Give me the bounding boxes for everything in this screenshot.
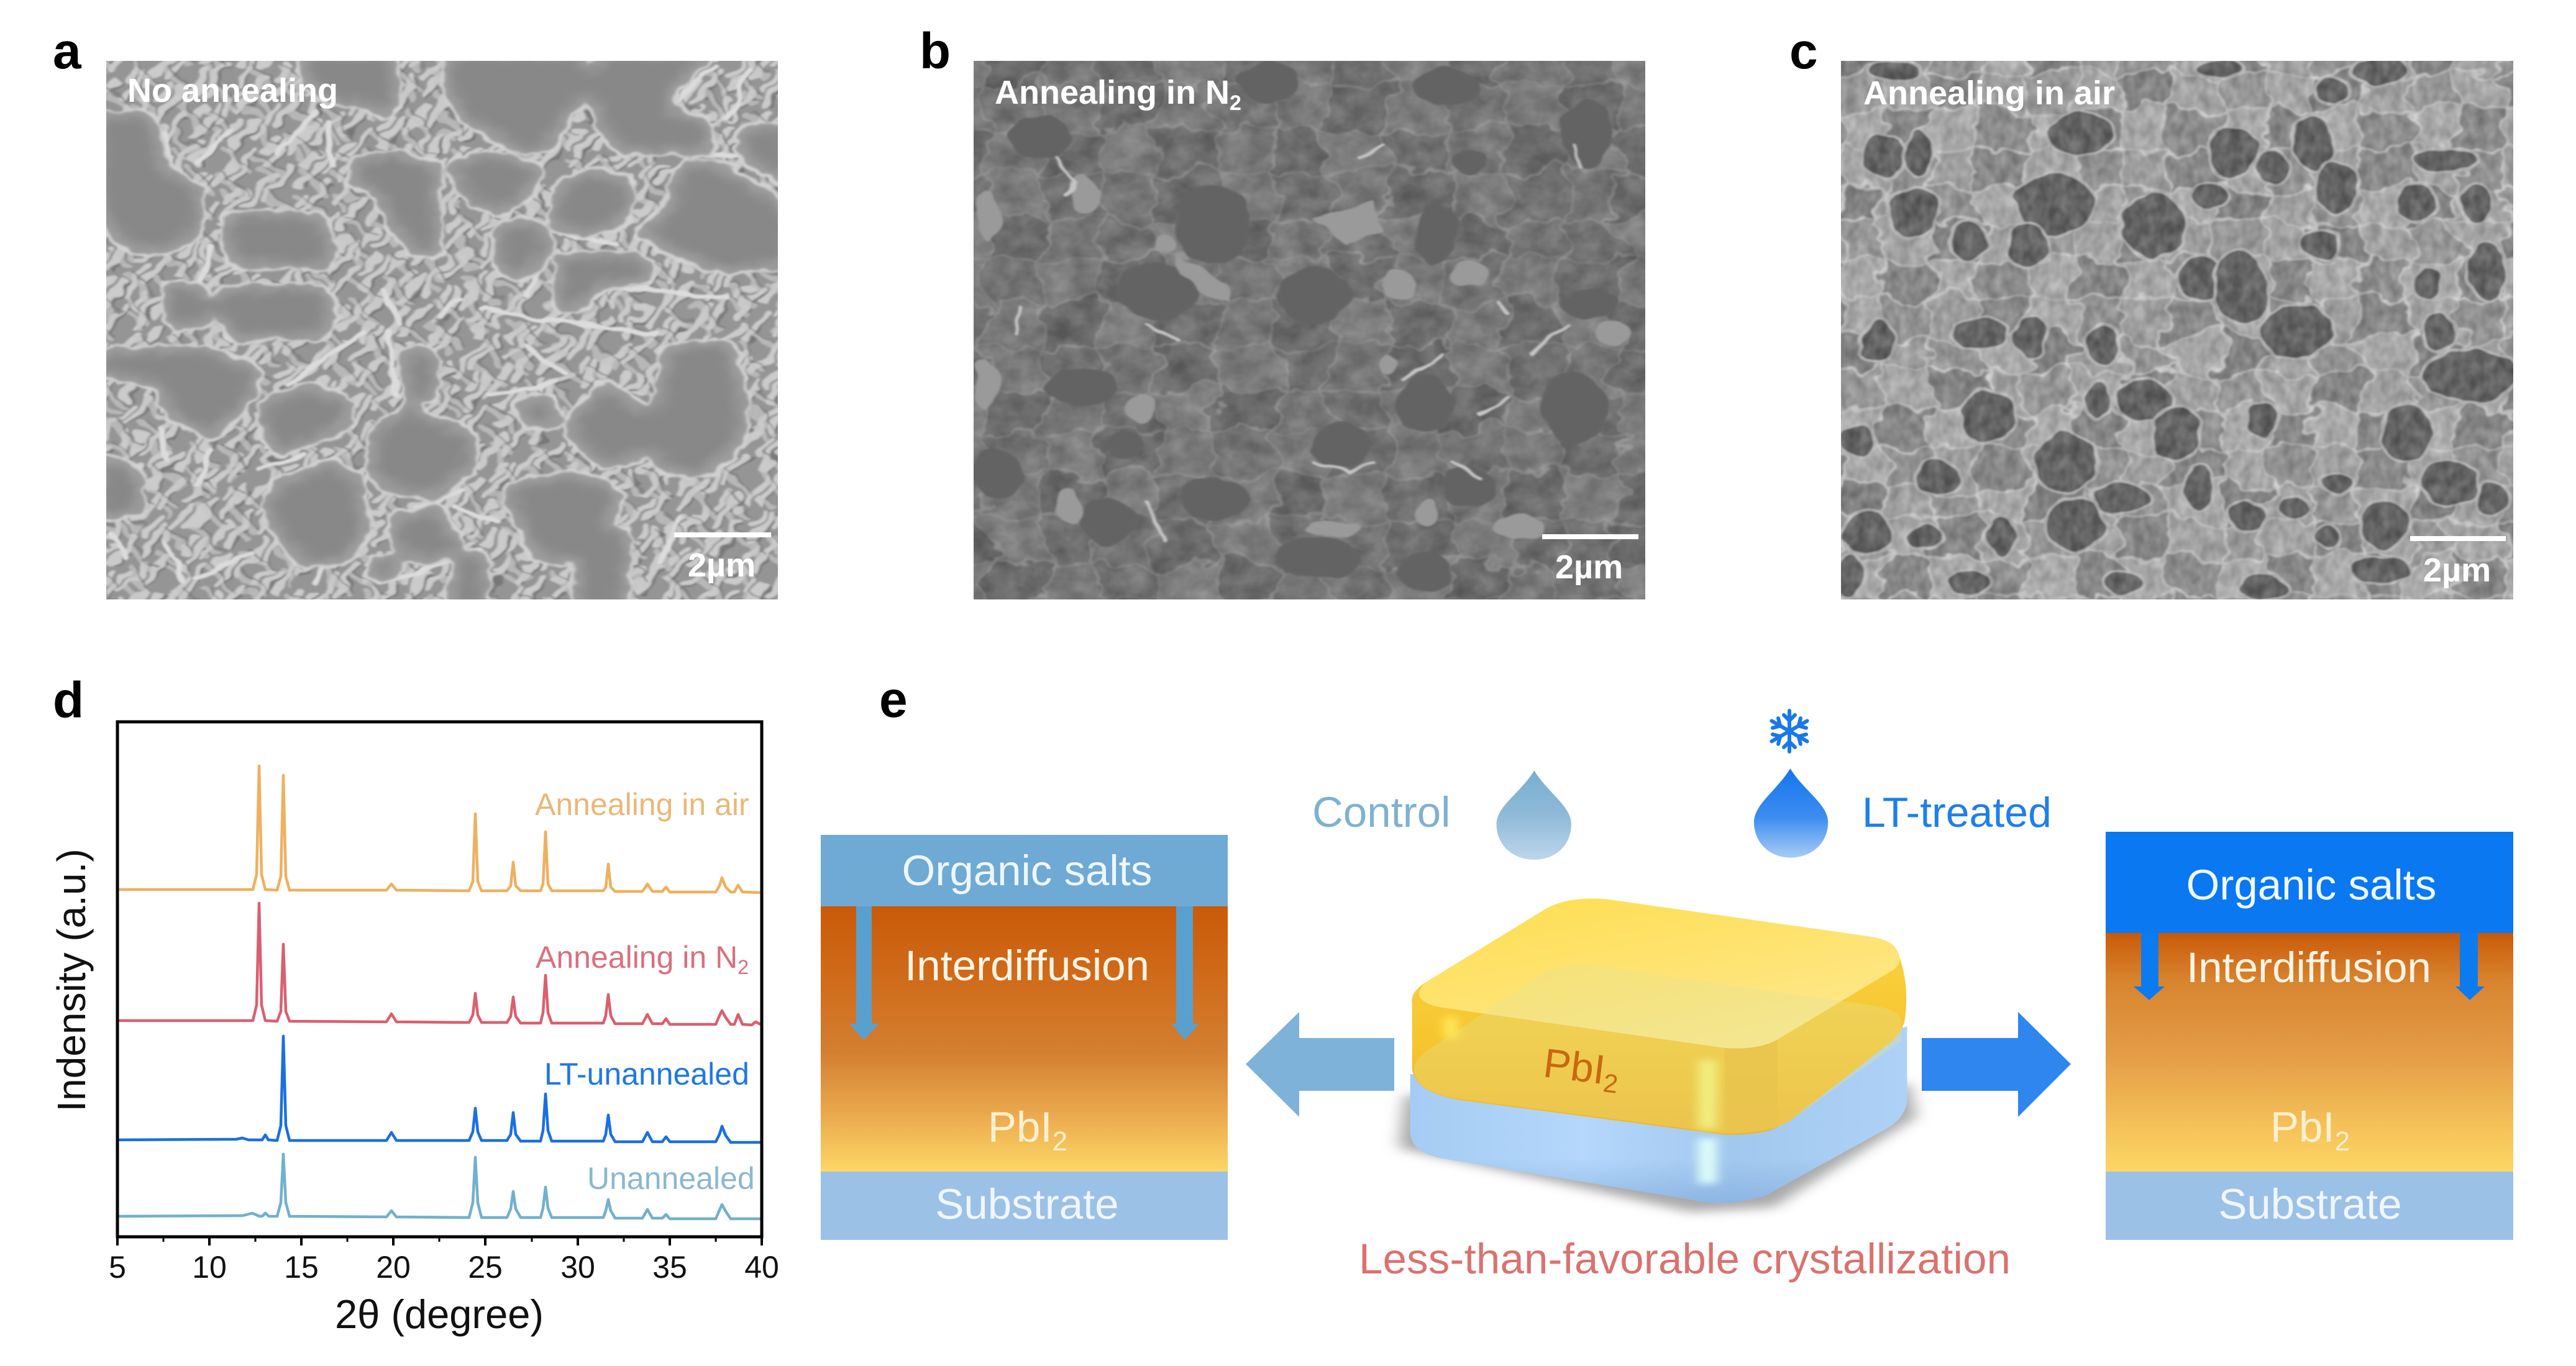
text: organic salts: Organic salts — [902, 847, 1152, 895]
x axis tick labels: 40 — [744, 1250, 779, 1285]
trace: LT-unannealed — [117, 1036, 762, 1142]
scale bar a: 2µm — [688, 547, 756, 584]
shadow — [1399, 1083, 1917, 1212]
layer: substrate (control) — [821, 1172, 1228, 1240]
text: organic salts: Organic salts — [2186, 861, 2436, 909]
trace: annealing in N2 — [117, 903, 762, 1025]
text: PbI2: PbI — [2270, 1103, 2335, 1151]
left stack: control — [821, 835, 1228, 1240]
caption: No annealing: No annealing — [127, 72, 338, 109]
LT-treated label: LT-treated — [1862, 789, 2052, 836]
x axis tick labels: 20 — [376, 1250, 411, 1285]
panel label d: d — [53, 672, 84, 729]
scale bar b: 2µm — [1555, 549, 1623, 586]
text: PbI2: PbI — [988, 1103, 1053, 1151]
caption: Annealing in N2: Annealing in N — [995, 74, 1230, 111]
layer: PbI2 gradient (control) — [821, 906, 1228, 1172]
y axis title: Indensity (a.u.) — [49, 849, 94, 1112]
layer: PbI2 gradient (LT) — [2106, 933, 2513, 1172]
diffusion arrow right (LT) — [2455, 933, 2485, 1000]
x axis tick labels: 30 — [560, 1250, 595, 1285]
text: substrate: Substrate — [935, 1180, 1119, 1228]
x axis title: 2θ (degree) — [335, 1291, 544, 1337]
text: PbI2: 2 — [1053, 1126, 1067, 1157]
icon: snowflake — [1769, 711, 1810, 752]
scale bar c: 2µm — [2423, 552, 2491, 589]
x axis tick labels: 10 — [192, 1250, 227, 1285]
yellow front-right strip — [1725, 1040, 1777, 1135]
text: PbI2 on block: PbI — [1541, 1039, 1608, 1093]
SEM image c — [1841, 61, 2513, 599]
chart frame and ticks — [117, 722, 762, 1245]
layer: organic salts (LT) — [2106, 832, 2513, 933]
series label: LT-unannealed: LT-unannealed — [544, 1057, 749, 1091]
panel e: schematic — [821, 672, 2513, 1283]
series label: annealing in N2: Annealing in N — [536, 940, 738, 975]
arrow to control — [1246, 1012, 1394, 1117]
translucent inner slab — [1414, 965, 1901, 1134]
caption: less-than-favorable crystallization: Less-than-favorable crystallization — [1359, 1235, 2011, 1283]
text: PbI2 on block: 2 — [1602, 1068, 1620, 1099]
text: interdiffusion: Interdiffusion — [2186, 944, 2431, 991]
series label: annealing in air: Annealing in air — [535, 787, 749, 822]
x axis tick labels: 35 — [652, 1250, 687, 1285]
icon: control drop — [1496, 770, 1571, 860]
yellow top — [1419, 899, 1899, 1049]
yellow highlights — [1444, 1017, 1717, 1129]
SEM image a — [106, 61, 778, 599]
diffusion arrow left (LT) — [2134, 933, 2165, 1000]
caption: Annealing in air: Annealing in air — [1863, 75, 2115, 112]
3D block — [1389, 898, 1925, 1218]
yellow body — [1412, 899, 1906, 1135]
blue lower slab — [1410, 1027, 1907, 1203]
x axis tick labels — [109, 1250, 779, 1285]
x axis tick labels: 5 — [109, 1250, 126, 1285]
scale bar c — [2410, 536, 2506, 589]
blue lower shading — [1410, 1027, 1907, 1203]
caption: Annealing in N2: 2 — [1230, 91, 1241, 115]
series label: annealing in N2: 2 — [738, 956, 749, 978]
text: interdiffusion: Interdiffusion — [905, 942, 1149, 990]
panel b: SEM annealing in N2 — [920, 23, 1688, 633]
text: substrate: Substrate — [2218, 1180, 2402, 1228]
arrow to LT-treated — [1922, 1012, 2071, 1117]
trace: annealing in air — [117, 766, 762, 893]
panel label a: a — [53, 23, 82, 80]
blue highlight — [1698, 1138, 1717, 1183]
panel label b: b — [920, 23, 951, 80]
right stack: LT-treated — [2106, 832, 2513, 1240]
diffusion arrow right (control) — [1171, 906, 1199, 1040]
scale bar a — [674, 532, 771, 584]
scale bar b — [1542, 534, 1638, 586]
control label: Control — [1312, 788, 1450, 836]
icon: LT drop — [1754, 768, 1828, 858]
panel a: SEM no annealing — [53, 23, 810, 624]
diffusion arrow left (control) — [849, 906, 879, 1040]
panel label c: c — [1789, 23, 1818, 80]
panel c: SEM annealing in air — [1789, 23, 2556, 633]
SEM image b — [974, 61, 1645, 599]
text: PbI2: 2 — [2335, 1126, 2350, 1157]
series label: unannealed: Unannealed — [587, 1161, 755, 1196]
layer: organic salts (control) — [821, 835, 1228, 906]
x axis tick labels: 15 — [284, 1250, 319, 1285]
layer: substrate (LT) — [2106, 1172, 2513, 1240]
panel label e: e — [879, 672, 908, 728]
panel d: XRD chart — [49, 672, 779, 1337]
drops — [1496, 768, 1828, 860]
x axis tick labels: 25 — [468, 1250, 503, 1285]
trace: unannealed — [117, 1154, 762, 1219]
